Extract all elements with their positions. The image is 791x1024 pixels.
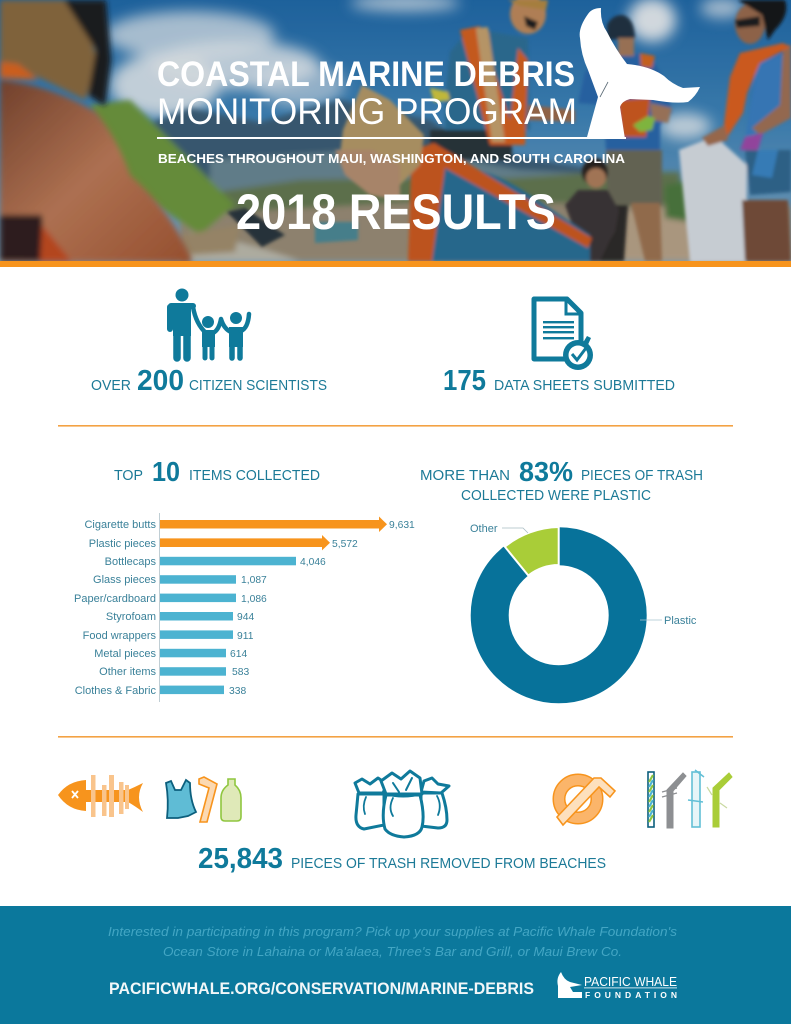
bar: glass pieces: Glass pieces: [93, 574, 156, 586]
heading: 83 percent plastic: MORE THAN: [420, 467, 510, 484]
results heading: 2018 RESULTS: [236, 184, 556, 240]
bar: other items: Other items: [99, 666, 156, 678]
bar: bottlecaps: 4,046: [300, 557, 326, 568]
icon: fish skeleton: [58, 775, 143, 817]
bar: food wrappers: Food wrappers: [83, 630, 156, 642]
child holding hands: [202, 316, 231, 358]
bar: glass pieces: [93, 574, 267, 586]
header photo: beach cleanup volunteers: [0, 0, 791, 262]
bar: styrofoam: 944: [237, 612, 254, 623]
footer invitation text: Ocean Store in Lahaina or Ma'alaea, Three's Bar and Grill, or Maui Brew Co.: [163, 944, 622, 959]
bar: plastic pieces: 5,572: [332, 539, 358, 550]
volunteer in cap: [578, 15, 672, 261]
heading: 83 percent plastic: COLLECTED WERE PLASTIC: [461, 487, 651, 504]
donut label: plastic: [640, 615, 697, 627]
striped straw: [648, 772, 654, 827]
stat: pieces of trash removed: 25,843: [198, 843, 283, 875]
icon: plastic bottle: [221, 779, 241, 821]
bar: food wrappers: 911: [237, 631, 254, 642]
bar: styrofoam: [106, 611, 254, 623]
title rule: [157, 137, 626, 139]
heading: 83 percent plastic: [420, 456, 703, 504]
donut label: other: Other: [470, 523, 498, 535]
heading: 83 percent plastic: PIECES OF TRASH: [581, 467, 703, 484]
stat: citizen scientists: OVER: [91, 377, 131, 394]
donut label: other: [470, 523, 528, 535]
collection bag: [679, 136, 747, 262]
stat: pieces of trash removed: PIECES OF TRASH REMOVED FROM BEACHES: [291, 855, 606, 872]
bar: cigarette butts: Cigarette butts: [84, 519, 156, 531]
bar: other items: [99, 666, 249, 678]
bar: paper/cardboard: [74, 593, 267, 605]
bar: paper/cardboard: 1,086: [241, 594, 267, 605]
bar: glass pieces: 1,087: [241, 575, 267, 586]
bar: clothes and fabric: 338: [229, 686, 246, 697]
footer invitation text: Interested in participating in this program? Pick up your supplies at Pacific Whale Foundation's: [108, 924, 678, 939]
stat: citizen scientists: CITIZEN SCIENTISTS: [189, 377, 327, 394]
footer invitation text: [108, 924, 678, 959]
bar chart: top 10 items: [74, 513, 415, 702]
crouching woman: [227, 85, 592, 261]
volunteer at right: [702, 0, 791, 261]
orange header bar: [0, 261, 791, 267]
bar: other items: 583: [232, 667, 249, 678]
bar: food wrappers: [83, 630, 254, 642]
left bag: [355, 778, 387, 829]
bar: metal pieces: [94, 648, 247, 660]
center bag: [381, 771, 423, 837]
icon: bent straw: [199, 777, 217, 822]
bar: plastic pieces: [89, 535, 358, 550]
foreground person at left: [0, 0, 192, 262]
bar: metal pieces: 614: [230, 649, 247, 660]
stat: data sheets: [443, 365, 675, 397]
bar: bottlecaps: [105, 556, 326, 568]
footer website address: PACIFICWHALE.ORG/CONSERVATION/MARINE-DEBRIS: [109, 979, 534, 998]
stat: data sheets: DATA SHEETS SUBMITTED: [494, 377, 675, 394]
icon: data sheet with check: [534, 299, 593, 370]
donut label: plastic: Plastic: [664, 615, 697, 627]
bamboo straw: [707, 773, 732, 827]
adult: [170, 288, 206, 358]
stat: data sheets: 175: [443, 365, 486, 397]
bar: cigarette butts: 9,631: [389, 520, 415, 531]
heading: top 10 items: ITEMS COLLECTED: [189, 467, 320, 484]
icon: reusable straws: [648, 770, 732, 828]
heading: top 10 items: TOP: [114, 467, 143, 484]
subtitle: BEACHES THROUGHOUT MAUI, WASHINGTON, AND SOUTH CAROLINA: [158, 151, 626, 166]
bar: clothes and fabric: Clothes & Fabric: [75, 685, 156, 697]
logo: Pacific Whale Foundation: PACIFIC WHALE: [584, 974, 677, 989]
glass straw: [688, 770, 704, 827]
bar: cigarette butts: [84, 516, 415, 532]
header title block: [157, 55, 626, 240]
logo: Pacific Whale Foundation: FOUNDATION: [585, 990, 677, 1000]
footer panel: [0, 906, 791, 1024]
bar: metal pieces: Metal pieces: [94, 648, 156, 660]
icon: no plastic straw symbol: [557, 778, 615, 825]
child: [565, 158, 619, 261]
heading: top 10 items: [114, 456, 320, 487]
bar: bottlecaps: Bottlecaps: [105, 556, 156, 568]
bar: clothes and fabric: [75, 685, 246, 697]
bar: paper/cardboard: Paper/cardboard: [74, 593, 156, 605]
title line 1: COASTAL MARINE DEBRIS: [157, 55, 575, 94]
stat: citizen scientists: 200: [137, 365, 184, 397]
title line 2: MONITORING PROGRAM: [157, 91, 577, 132]
stat: pieces of trash removed: [198, 843, 606, 875]
icon: white whale tail: [580, 8, 700, 139]
bar: styrofoam: Styrofoam: [106, 611, 156, 623]
heading: top 10 items: 10: [152, 456, 180, 487]
child with raised arm: [229, 312, 249, 358]
icon: filled trash bags: [355, 771, 449, 837]
metal straw: [662, 773, 686, 828]
right bag: [421, 778, 449, 828]
icon: adult and two children: [170, 288, 249, 358]
bar: plastic pieces: Plastic pieces: [89, 538, 156, 550]
icon: plastic bag: [166, 780, 196, 818]
volunteer with orange vest: [430, 0, 575, 160]
logo: Pacific Whale Foundation: [557, 972, 677, 1000]
heading: 83 percent plastic: 83%: [519, 456, 573, 487]
donut chart: plastic share: [470, 523, 697, 684]
stat: citizen scientists: [91, 365, 327, 397]
